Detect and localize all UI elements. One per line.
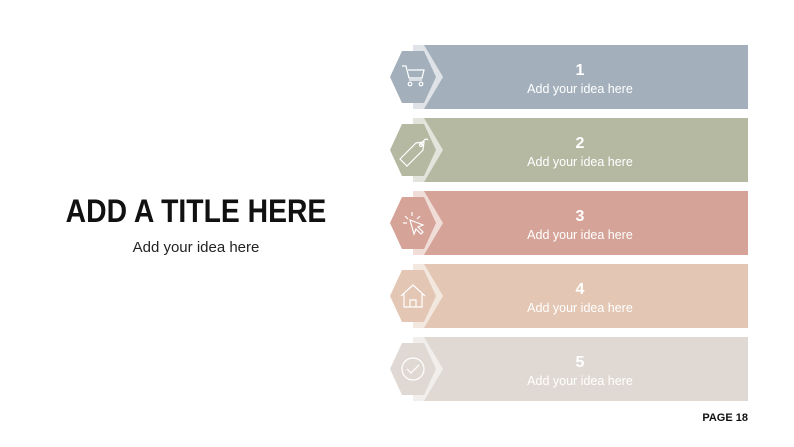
step 3 <box>390 191 748 255</box>
title: ADD A TITLE HERE <box>66 193 326 229</box>
icon: cart <box>402 66 424 86</box>
step 5: Add your idea here <box>527 374 633 388</box>
page number: PAGE 18 <box>702 412 748 424</box>
step 5: 5 <box>576 354 585 371</box>
step 4: 4 <box>576 281 585 298</box>
step 5 <box>390 337 748 401</box>
step 2: 2 <box>576 135 585 152</box>
subtitle: Add your idea here <box>133 239 259 256</box>
step 2 <box>390 118 748 182</box>
step 3: Add your idea here <box>527 228 633 242</box>
icon: cursor click <box>403 212 423 234</box>
step 3: 3 <box>576 208 585 225</box>
step 1: 1 <box>576 62 585 79</box>
step 2: Add your idea here <box>527 155 633 169</box>
icon: check circle <box>402 358 424 380</box>
icon: tag <box>400 139 428 166</box>
step 1 <box>390 45 748 109</box>
step 4 <box>390 264 748 328</box>
step 1: Add your idea here <box>527 82 633 96</box>
icon: house <box>401 285 425 307</box>
step 4: Add your idea here <box>527 301 633 315</box>
